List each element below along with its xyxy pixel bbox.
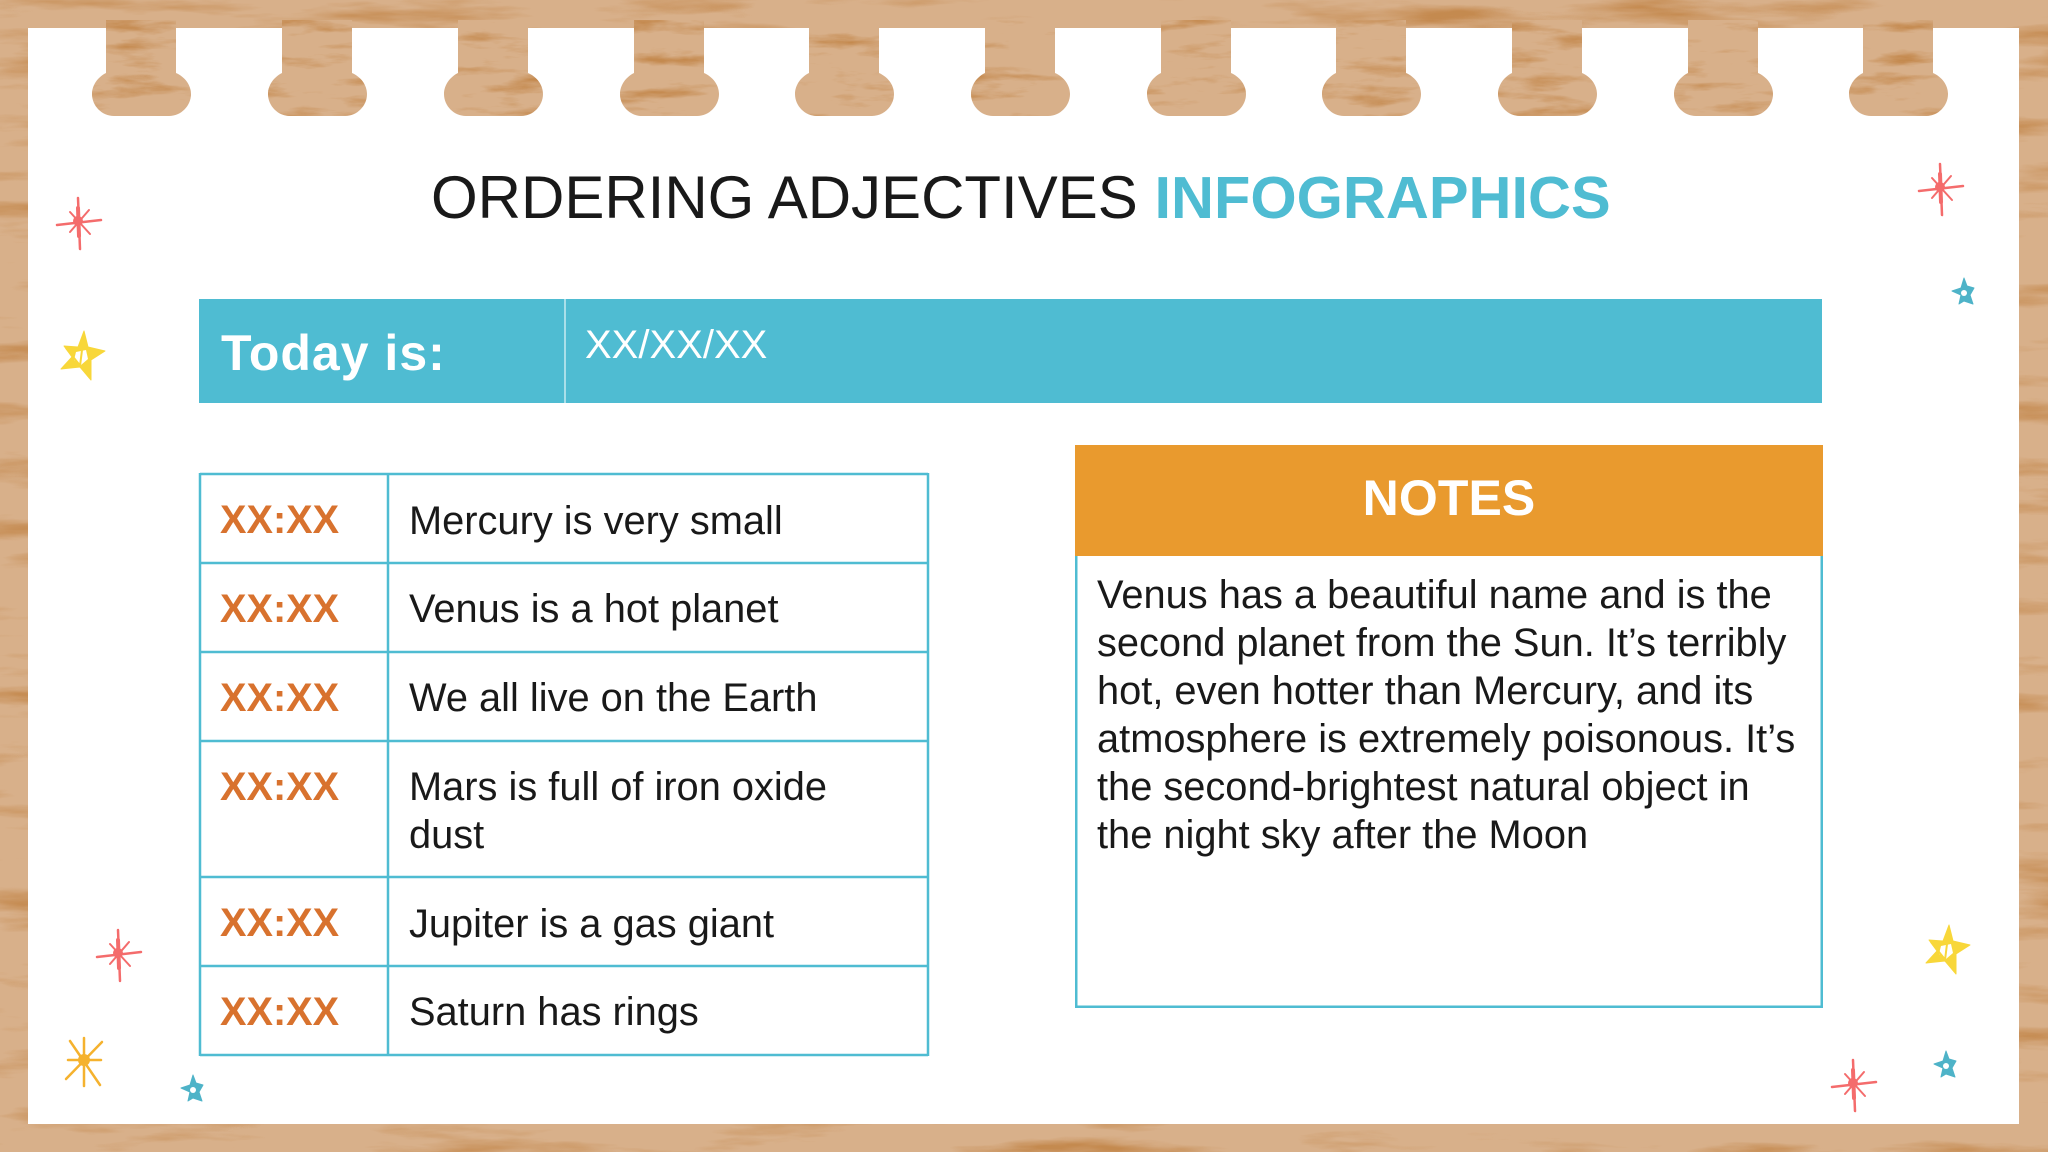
icon: blue star lower left xyxy=(180,1074,204,1102)
notes panel xyxy=(1075,445,1823,1008)
row 2: Venus is a hot planet xyxy=(409,587,779,631)
notes text: Venus has a beautiful name and is the xyxy=(1097,573,1772,617)
row 2: XX:XX xyxy=(220,587,339,631)
notes text: the second-brightest natural object in xyxy=(1097,765,1750,809)
row 1 xyxy=(220,498,783,543)
date label: Today is: xyxy=(221,325,446,381)
row 5: Jupiter is a gas giant xyxy=(409,902,774,946)
notes text: atmosphere is extremely poisonous. It’s xyxy=(1097,717,1795,761)
row 4: XX:XX xyxy=(220,765,339,809)
notes text: the night sky after the Moon xyxy=(1097,813,1588,857)
icon: blue star lower right xyxy=(1934,1050,1956,1078)
icon: red sparkle top left xyxy=(56,196,102,250)
schedule table xyxy=(198,472,930,1056)
row 6: Saturn has rings xyxy=(409,990,699,1034)
row 1: Mercury is very small xyxy=(409,499,783,543)
date value: XX/XX/XX xyxy=(585,323,767,367)
icon: yellow star lower right xyxy=(1926,924,1970,974)
notes heading: NOTES xyxy=(1363,470,1535,526)
icon: blue star top right xyxy=(1952,278,1974,304)
row 6: XX:XX xyxy=(220,990,339,1034)
title: ORDERING ADJECTIVES INFOGRAPHICS xyxy=(431,164,1611,231)
row 5: XX:XX xyxy=(220,901,339,945)
row 3: We all live on the Earth xyxy=(409,676,818,720)
notes text: hot, even hotter than Mercury, and its xyxy=(1097,669,1753,713)
row 4: Mars is full of iron oxide xyxy=(409,765,827,809)
binder tabs xyxy=(92,20,1948,116)
date bar xyxy=(199,299,1822,403)
row 3 xyxy=(220,676,818,720)
row 4: dust xyxy=(409,813,484,857)
icon: yellow star left xyxy=(60,330,106,380)
notes text: second planet from the Sun. It’s terribly xyxy=(1097,621,1786,665)
icon: red sparkle bottom right xyxy=(1830,1058,1878,1112)
row 1: XX:XX xyxy=(220,498,339,542)
icon: red sparkle lower left xyxy=(96,928,142,982)
row 5 xyxy=(220,901,774,946)
row 4 xyxy=(220,765,827,857)
notes text xyxy=(1097,573,1795,857)
row 6 xyxy=(220,990,699,1034)
icon: red sparkle top right xyxy=(1918,162,1964,216)
row 2 xyxy=(220,587,779,631)
icon: orange burst lower left xyxy=(64,1036,104,1088)
row 3: XX:XX xyxy=(220,676,339,720)
notes heading xyxy=(1075,445,1823,556)
